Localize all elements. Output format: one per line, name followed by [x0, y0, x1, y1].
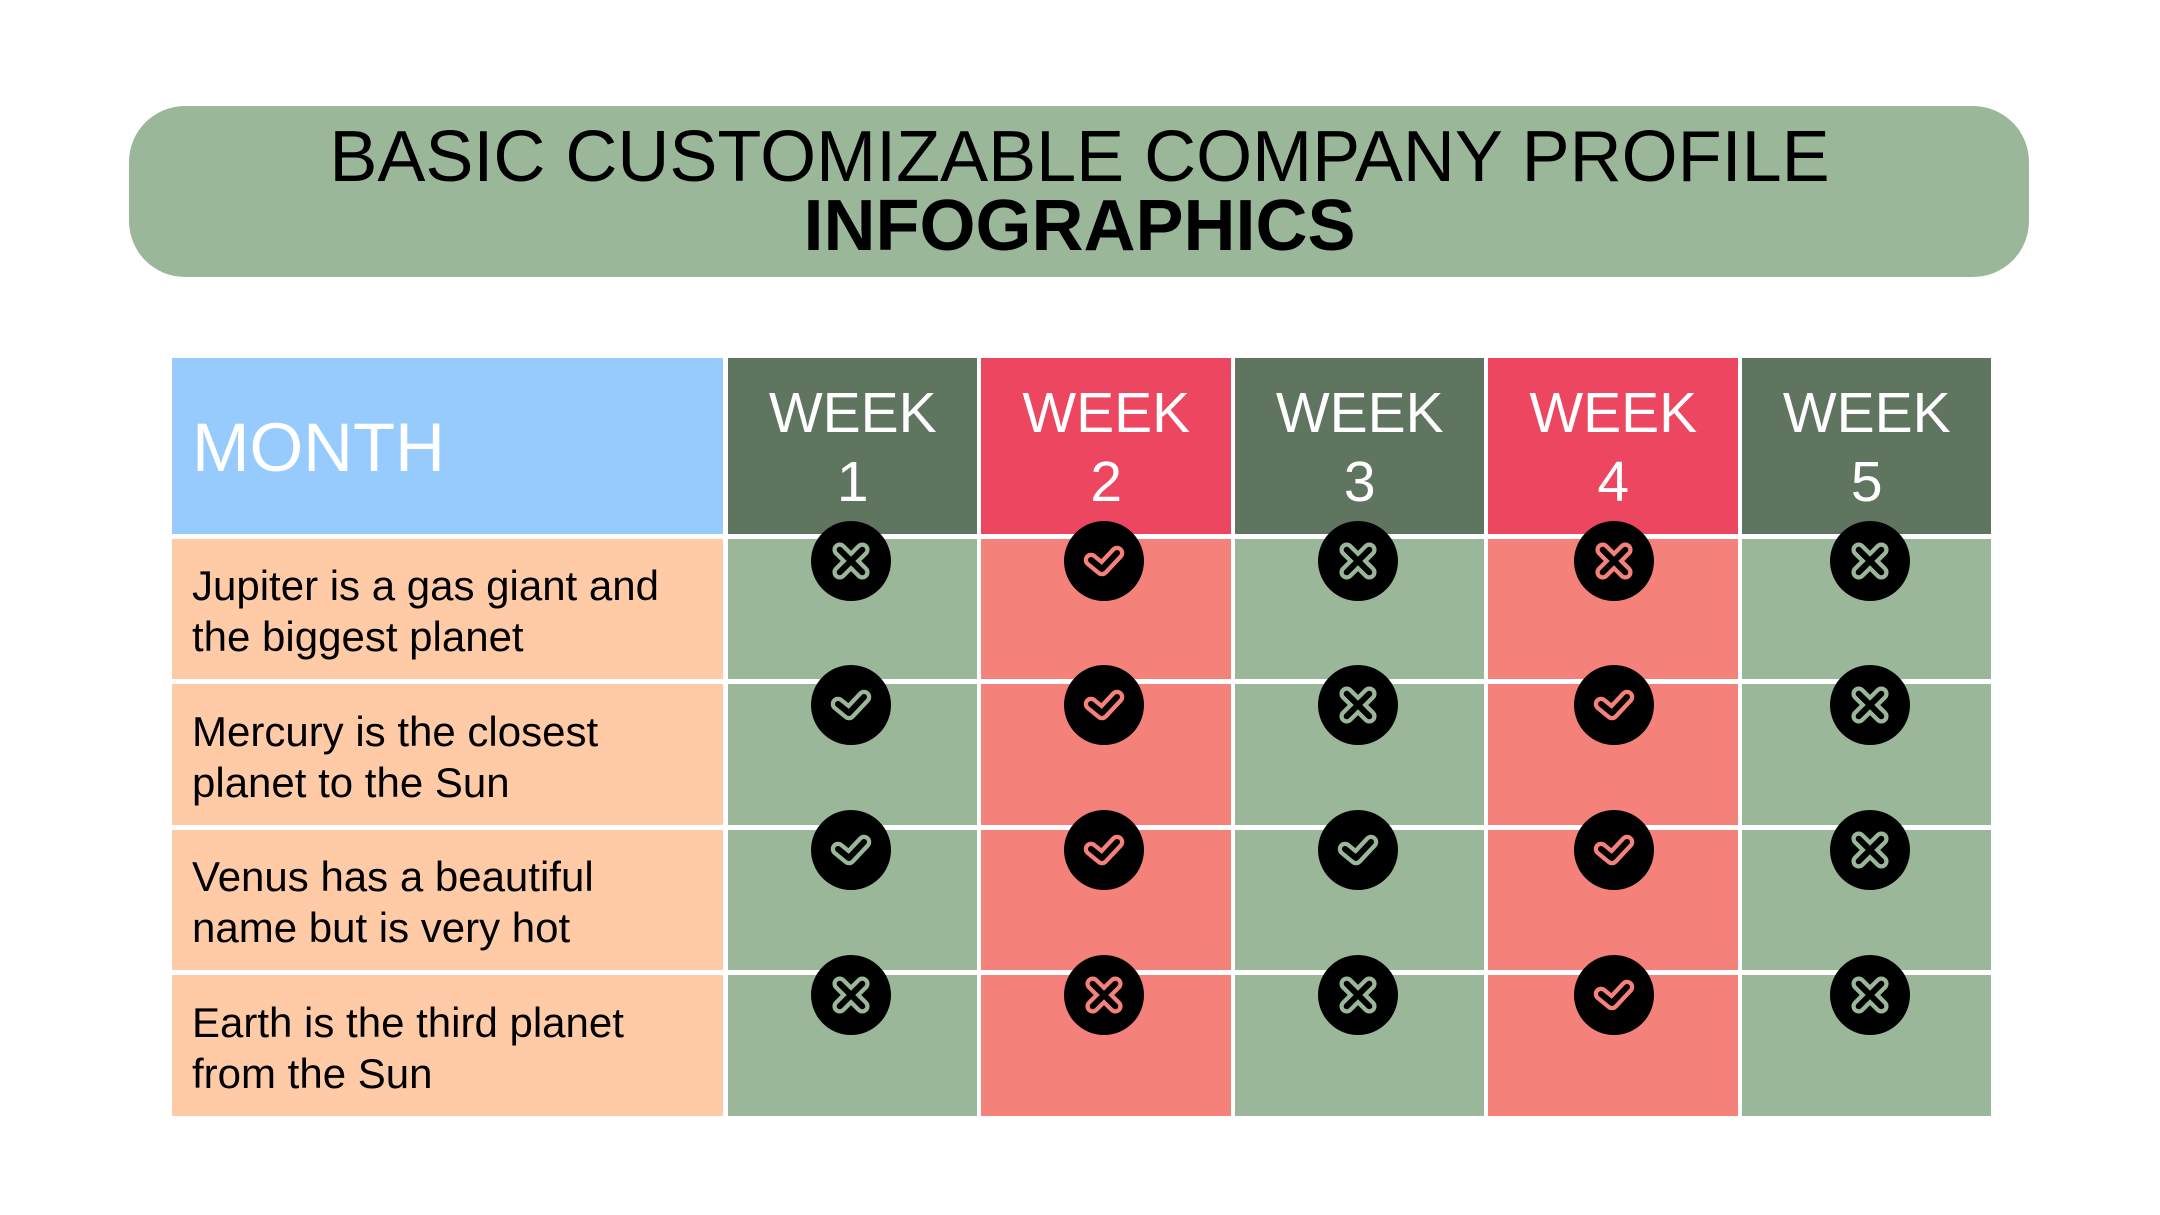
header: week 3: 3	[1344, 450, 1376, 514]
icon: cross, Jupiter week 3	[1318, 521, 1398, 601]
row label: Mercury: Mercury is the closest	[192, 708, 598, 754]
header: week 3	[1234, 358, 1484, 534]
icon: check, Venus week 3	[1318, 810, 1398, 890]
row label: Jupiter: Jupiter is a gas giant and	[192, 562, 659, 609]
icon: cross, Jupiter week 4	[1574, 521, 1654, 601]
icon: cross, Earth week 2	[1064, 955, 1144, 1035]
icon: check, Mercury week 1	[811, 665, 891, 745]
header: week 4: WEEK	[1529, 381, 1697, 445]
icon: cross, Venus week 5	[1830, 810, 1910, 890]
header: month	[172, 358, 723, 534]
row label: Mercury: planet to the Sun	[192, 758, 510, 806]
header: week 4	[1488, 358, 1738, 534]
icon: check, Jupiter week 2	[1064, 521, 1144, 601]
row label: Earth: Earth is the third planet	[192, 998, 624, 1046]
row label: Mercury	[172, 684, 723, 824]
row label: Jupiter: the biggest planet	[192, 613, 524, 660]
icon: check, Mercury week 4	[1574, 665, 1654, 745]
icon: check, Venus week 1	[811, 810, 891, 890]
icon: cross, Jupiter week 5	[1830, 521, 1910, 601]
row label: Earth: from the Sun	[192, 1050, 432, 1096]
row label: Venus	[172, 830, 723, 970]
header: week 4: 4	[1597, 450, 1629, 514]
header: week 5	[1742, 358, 1991, 534]
header: week 2	[981, 358, 1230, 534]
title banner	[129, 106, 2029, 277]
title text: BASIC CUSTOMIZABLE COMPANY PROFILE	[329, 116, 1830, 196]
icon: cross, Jupiter week 1	[811, 521, 891, 601]
icon: cross, Earth week 3	[1318, 955, 1398, 1035]
title text: INFOGRAPHICS	[803, 186, 1356, 266]
header: week 1	[728, 358, 977, 534]
header: week 1: 1	[837, 450, 869, 514]
icon: cross, Mercury week 3	[1318, 665, 1398, 745]
header: week 3: WEEK	[1276, 381, 1444, 445]
title text	[329, 116, 1830, 266]
header: week 5: WEEK	[1783, 381, 1951, 445]
icon: cross, Earth week 5	[1830, 955, 1910, 1035]
header: week 1: WEEK	[769, 381, 937, 445]
row label: Earth	[172, 975, 723, 1116]
header: week 5: 5	[1851, 450, 1883, 514]
icon: check, Venus week 4	[1574, 810, 1654, 890]
icon: cross, Earth week 1	[811, 955, 891, 1035]
header: month: MONTH	[192, 409, 445, 486]
row label: Venus: Venus has a beautiful	[192, 853, 594, 900]
icon: cross, Mercury week 5	[1830, 665, 1910, 745]
row label: Venus: name but is very hot	[192, 904, 570, 951]
icon: check, Mercury week 2	[1064, 665, 1144, 745]
header: week 2: 2	[1090, 450, 1122, 514]
row label: Jupiter	[172, 538, 723, 679]
icon: check, Venus week 2	[1064, 810, 1144, 890]
header: week 2: WEEK	[1022, 381, 1190, 445]
icon: check, Earth week 4	[1574, 955, 1654, 1035]
